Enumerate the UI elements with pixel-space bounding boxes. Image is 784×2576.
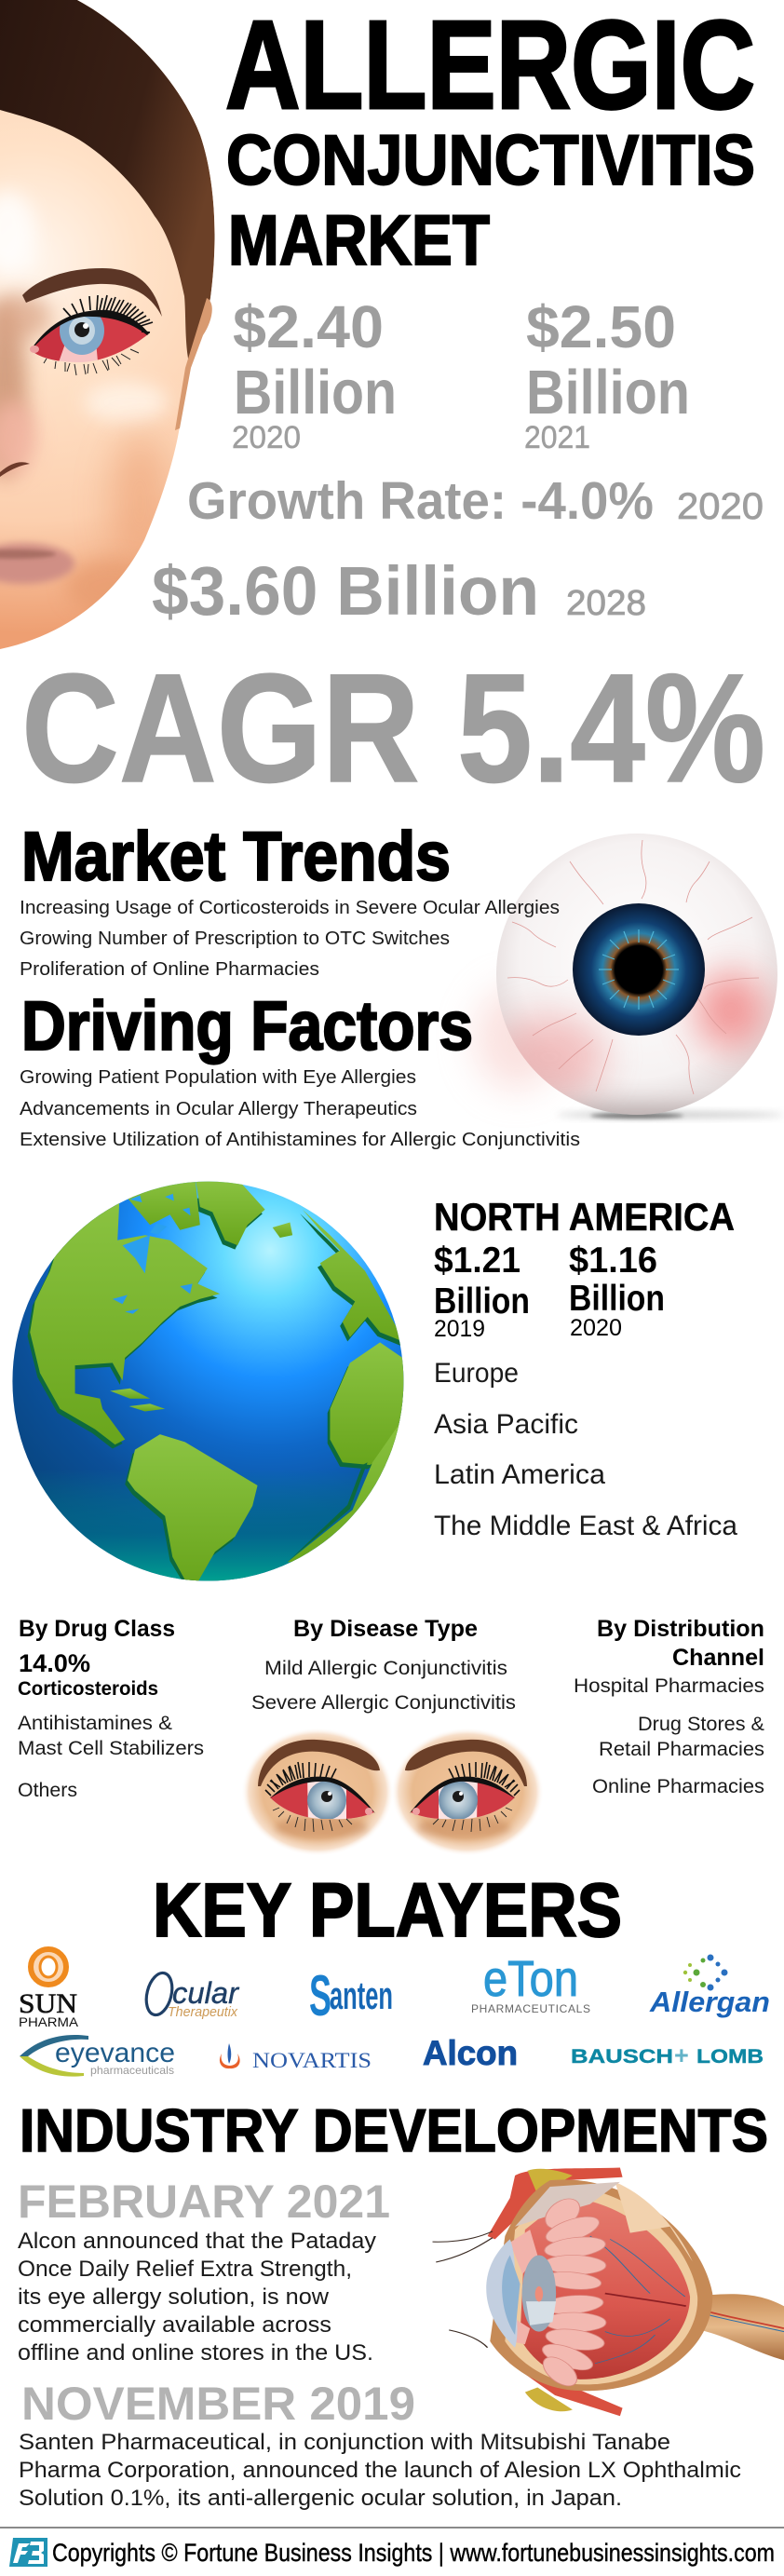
ear edge xyxy=(175,298,212,430)
logo: alcon: Alcon xyxy=(423,2034,518,2072)
trend list: Proliferation of Online Pharmacies xyxy=(20,959,319,980)
illustration: red eyeball xyxy=(475,834,784,1131)
panel: by distribution channel: Retail Pharmacies xyxy=(599,1739,764,1760)
panel: by drug class: 14.0% xyxy=(19,1649,90,1677)
development text: Pharma Corporation, announced the launch of Alesion LX Ophthalmic xyxy=(19,2458,741,2483)
development text: Once Daily Relief Extra Strength, xyxy=(18,2257,352,2282)
panel: by distribution channel: Drug Stores & xyxy=(638,1714,764,1735)
stat: growth rate: 2020 xyxy=(677,486,764,527)
title: MARKET xyxy=(228,201,490,280)
logo: eyevance: eyevance xyxy=(55,2038,175,2068)
logo: bausch and lomb: BAUSCH xyxy=(571,2046,673,2068)
panel: november 2019 development: NOVEMBER 2019 xyxy=(21,2378,415,2430)
stat: 2021 market size: 2021 xyxy=(524,420,590,455)
stat: north america 2020 xyxy=(569,1241,665,1341)
stat: north america 2019: 2019 xyxy=(434,1316,485,1342)
stat: 2020 market size: $2.40 xyxy=(233,293,384,360)
logo: santen: S xyxy=(309,1964,331,2028)
stat: north america 2019: $1.21 xyxy=(434,1241,520,1281)
trend list xyxy=(20,898,560,980)
development text: offline and online stores in the US. xyxy=(18,2340,373,2366)
region list: Latin America xyxy=(434,1459,605,1490)
stat: north america 2019 xyxy=(434,1241,530,1342)
logo: ocular therapeutix: Therapeutix xyxy=(168,2004,237,2020)
panel: by drug class: Antihistamines & xyxy=(18,1713,172,1734)
stat: 2020 market size: Billion xyxy=(234,358,397,427)
panel: november 2019 development xyxy=(19,2378,741,2511)
panel: by drug class xyxy=(18,1616,204,1801)
panel: regional data xyxy=(434,1195,737,1541)
stat: growth rate: Growth Rate: -4.0% xyxy=(187,471,654,531)
factor list: Growing Patient Population with Eye Allergies xyxy=(20,1067,416,1088)
logo: eyevance xyxy=(20,2035,175,2077)
logo: bausch and lomb: LOMB xyxy=(696,2046,764,2068)
stat: 2020 market size xyxy=(232,293,397,455)
panel: by drug class: Others xyxy=(18,1780,77,1801)
trend list: Increasing Usage of Corticosteroids in Severe Ocular Allergies xyxy=(20,898,560,918)
stat: north america 2019: Billion xyxy=(434,1281,530,1322)
panel: driving factors xyxy=(20,987,580,1150)
development text: its eye allergy solution, is now xyxy=(18,2285,330,2310)
panel: by drug class: Corticosteroids xyxy=(18,1678,158,1700)
region list: The Middle East & Africa xyxy=(434,1511,737,1541)
development text: Alcon announced that the Pataday xyxy=(18,2229,376,2254)
logo: eyevance: pharmaceuticals xyxy=(90,2064,174,2077)
stat: 2021 market size: Billion xyxy=(526,358,690,427)
development text: commercially available across xyxy=(18,2312,331,2338)
logo: novartis: NOVARTIS xyxy=(252,2049,372,2072)
panel: february 2021 development: FEBRUARY 2021 xyxy=(18,2176,390,2228)
logo: bausch and lomb xyxy=(571,2041,764,2069)
panel: by distribution channel: Hospital Pharmacies xyxy=(574,1675,764,1697)
region list xyxy=(434,1358,737,1541)
region list: Asia Pacific xyxy=(434,1409,578,1440)
logo: bausch and lomb: + xyxy=(674,2041,689,2069)
factor list: Extensive Utilization of Antihistamines for Allergic Conjunctivitis xyxy=(20,1130,580,1150)
stat: 2021 market size xyxy=(524,293,690,455)
development text xyxy=(19,2430,741,2511)
logo: novartis xyxy=(220,2043,372,2072)
title xyxy=(225,0,755,280)
heading: market trends: Market Trends xyxy=(21,818,451,895)
panel: by disease type: Severe Allergic Conjunctivitis xyxy=(251,1692,516,1714)
development text xyxy=(18,2229,376,2366)
illustration: pair of red eyes xyxy=(241,1728,544,1856)
panel: by drug class: By Drug Class xyxy=(19,1616,175,1642)
stat: north america 2020: Billion xyxy=(569,1279,665,1319)
eye xyxy=(30,295,154,375)
logo: eton pharmaceuticals: PHARMACEUTICALS xyxy=(471,2002,590,2015)
panel: by disease type: Mild Allergic Conjunctivitis xyxy=(264,1658,507,1679)
logo: sun pharma xyxy=(19,1949,79,2029)
logo: santen xyxy=(309,1964,393,2028)
heading: driving factors: Driving Factors xyxy=(21,987,473,1064)
illustration: woman's face with red eye xyxy=(0,0,223,652)
illustration: eye anatomy cross-section xyxy=(433,2167,784,2416)
factor list: Advancements in Ocular Allergy Therapeutics xyxy=(20,1099,417,1119)
trend list: Growing Number of Prescription to OTC Switches xyxy=(20,929,450,949)
logo: ocular therapeutix: cular xyxy=(172,1976,239,2010)
panel: by disease type xyxy=(251,1616,516,1714)
factor list xyxy=(20,1067,580,1150)
panel: by disease type: By Disease Type xyxy=(293,1616,478,1642)
logo: allergan: Allergan xyxy=(649,1986,770,2018)
region list: Europe xyxy=(434,1358,519,1389)
panel: market trends xyxy=(20,818,560,980)
panel: by drug class: Mast Cell Stabilizers xyxy=(18,1738,204,1759)
heading: north america: NORTH AMERICA xyxy=(434,1195,735,1239)
logo: ocular therapeutix xyxy=(142,1971,239,2020)
stat: north america 2020: 2020 xyxy=(570,1315,622,1341)
stat: 2021 market size: $2.50 xyxy=(526,293,676,360)
eyebrow xyxy=(22,268,162,317)
logo: fortune business insights xyxy=(9,2538,47,2567)
panel: by distribution channel: By Distribution xyxy=(597,1616,764,1642)
development text: Santen Pharmaceutical, in conjunction with Mitsubishi Tanabe xyxy=(19,2430,670,2455)
logo: allergan xyxy=(649,1954,770,2018)
panel: by distribution channel: Channel xyxy=(672,1645,764,1671)
panel: february 2021 development xyxy=(18,2176,390,2366)
panel: by distribution channel: Online Pharmacies xyxy=(592,1776,764,1797)
logo: sun pharma: PHARMA xyxy=(19,2014,79,2029)
logo: sun pharma: SUN xyxy=(19,1988,77,2019)
stat: north america 2020: $1.16 xyxy=(569,1241,657,1281)
stat: 2020 market size: 2020 xyxy=(232,420,301,455)
logo: eton pharmaceuticals: eTon xyxy=(483,1951,578,2007)
panel: by distribution channel xyxy=(574,1616,764,1797)
heading: key players: KEY PLAYERS xyxy=(153,1868,622,1953)
development text: Solution 0.1%, its anti-allergenic ocular solution, in Japan. xyxy=(19,2486,622,2511)
logo: santen: anten xyxy=(330,1973,393,2017)
stat: 2028 forecast: $3.60 Billion xyxy=(152,552,539,630)
stat: 2028 forecast: 2028 xyxy=(566,584,646,623)
illustration: globe xyxy=(12,1176,410,1584)
